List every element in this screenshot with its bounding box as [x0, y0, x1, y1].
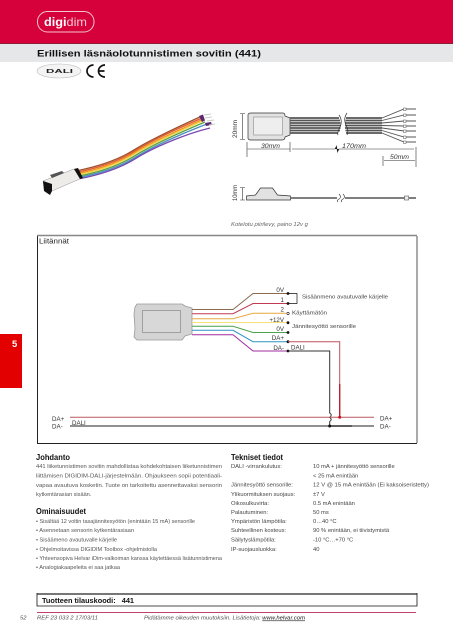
- specification table: 40: [313, 547, 319, 553]
- title strip: Erillisen läsnäolotunnistimen sovitin (441): [37, 48, 261, 60]
- icon: DALI logo: DALI: [46, 69, 74, 75]
- terminal descriptions: Jännitesyöttö sensorille: [292, 324, 356, 330]
- specification table: Jännitesyöttö sensorille:: [231, 482, 293, 488]
- terminal labels: 0V: [276, 326, 285, 333]
- text block: introduction: [36, 464, 222, 498]
- footer text: Pidätämme oikeuden muutoksiin. Lisätietoja: www.helvar.com: [144, 616, 305, 622]
- terminal labels: 0V: [276, 287, 285, 294]
- heading: Johdanto: Johdanto: [36, 453, 70, 462]
- text block: introduction: 441 liiketunnistimen sovitin mahdollistaa kohdekohtaisen liiketunnistimen: [36, 464, 222, 470]
- terminal descriptions: DALI: [291, 344, 305, 352]
- dimension line: 50mm: [383, 154, 415, 166]
- specification table: Suhteellinen kosteus:: [231, 528, 286, 534]
- terminal labels: 2: [281, 306, 285, 314]
- panel: connections frame: [37, 235, 417, 444]
- specification table: Oikosulkuvirta:: [231, 501, 269, 507]
- dimension label: 10mm: [232, 185, 245, 201]
- footer rule: [37, 612, 416, 613]
- wiring diagram: coloured wires: [192, 294, 288, 351]
- feature list: [36, 519, 223, 571]
- specification table: DALI -virrankulutus:: [231, 464, 282, 470]
- bus labels: DA-: [52, 424, 63, 430]
- specification table: 10 mA + jännitesyöttö sensorille: [313, 464, 395, 470]
- heading: Ominaisuudet: Ominaisuudet: [36, 507, 86, 516]
- specification table: < 25 mA enintään: [313, 474, 358, 480]
- heading: Tekniset tiedot: Tekniset tiedot: [231, 453, 283, 462]
- specification table: [231, 464, 429, 553]
- text block: introduction: vapaa avautuva kosketin. Tuote on tarkoitettu asennettavaksi sensorin: [36, 483, 222, 489]
- terminal labels: DA+: [272, 335, 284, 342]
- specification table: -10 °C…+70 °C: [313, 538, 353, 544]
- terminal labels: 1: [281, 297, 285, 304]
- dimension label: 20mm: 20mm: [232, 120, 239, 138]
- bus labels: DA-: [380, 424, 391, 430]
- icon: CE mark: [87, 65, 105, 77]
- heading: Liitännät: Liitännät: [39, 236, 70, 246]
- feature list: • Asennetaan sensorin kytkentärasiaan: [36, 528, 134, 534]
- specification table: 0.5 mA enintään: [313, 501, 355, 507]
- specification table: ±7 V: [313, 492, 325, 498]
- feature list: • Sisäämeno avautuvalle kärjelle: [36, 538, 117, 544]
- text block: introduction: kytkentärasian sisään.: [36, 492, 92, 498]
- footer text: 52: [20, 616, 27, 622]
- specification table: IP-suojausluokka:: [231, 547, 277, 553]
- wiring diagram: module: [134, 304, 192, 340]
- bus labels: DALI: [72, 420, 86, 427]
- feature list: • Yhteensopiva Helvar iDim-valkoiman kanssa käytettäessä lisätunnistimena: [36, 556, 223, 562]
- terminal descriptions: Sisäänmeno avautuvalle kärjelle: [302, 294, 388, 300]
- dimension line: 30mm: [247, 142, 290, 157]
- logo: digidim: digidim: [44, 15, 87, 29]
- specification table: Palautuminen:: [231, 510, 268, 516]
- dimension label: 20mm: [232, 114, 245, 140]
- logo: digidim: [38, 12, 94, 32]
- order code box: [37, 593, 417, 606]
- specification table: 50 ms: [313, 510, 329, 516]
- footer text: REF 23 033 2 17/03/11: [37, 616, 98, 622]
- icon: DALI logo: [37, 64, 81, 78]
- caption: Kotelotu piirilevy, paino 12v g: [231, 222, 309, 228]
- section tab: [0, 334, 22, 388]
- bus labels: [52, 416, 393, 430]
- specification table: Ympäristön lämpötila:: [231, 519, 287, 525]
- title strip: [0, 44, 453, 62]
- terminal labels: DA-: [273, 345, 284, 352]
- terminals: [287, 292, 297, 352]
- dimension label: 10mm: 10mm: [232, 185, 239, 201]
- specification table: 90 % enintään, ei tiivistymistä: [313, 528, 390, 534]
- feature list: • Ohjelmoitavissa DIGIDIM Toolbox -ohjelmistolla: [36, 547, 158, 553]
- dimension line: 30mm: 30mm: [261, 143, 281, 150]
- order code box: Tuotteen tilauskoodi: 441: [42, 596, 134, 605]
- dimension line: 170mm: [292, 143, 416, 167]
- section tab: 5: [12, 339, 18, 350]
- DALI bus wiring: [70, 342, 374, 428]
- terminal labels: +12V: [269, 317, 285, 324]
- product photo: module with rainbow ribbon: [43, 114, 215, 195]
- header band: [0, 0, 453, 44]
- feature list: • Analogiakaapeleita ei saa jatkaa: [36, 565, 121, 571]
- specification table: Ylikuormituksen suojaus:: [231, 492, 296, 498]
- terminal descriptions: Käyttämätön: [292, 310, 327, 316]
- specification table: 0…40 °C: [313, 519, 337, 525]
- dimension line: 50mm: 50mm: [390, 154, 410, 161]
- footer text: [20, 616, 305, 622]
- terminal labels: [269, 287, 285, 352]
- text block: introduction: liittämisen DIGIDIM-DALI-järjestelmään. Ohjaukseen sopii potentiaali-: [36, 474, 222, 480]
- bus labels: DA+: [380, 416, 393, 422]
- dimension drawing: side view: [246, 188, 416, 202]
- feature list: • Sisältää 12 voltin tasajännitesyötön (enintään 15 mA) sensorille: [36, 519, 195, 525]
- dimension line: 170mm: 170mm: [342, 143, 367, 150]
- bus labels: DA+: [52, 416, 65, 423]
- specification table: 12 V @ 15 mA enintään (Ei kaksoiseristetty): [313, 482, 429, 488]
- specification table: Säilytyslämpötila:: [231, 538, 276, 544]
- dimension drawing: top view: [248, 108, 416, 144]
- terminal descriptions: [291, 294, 388, 352]
